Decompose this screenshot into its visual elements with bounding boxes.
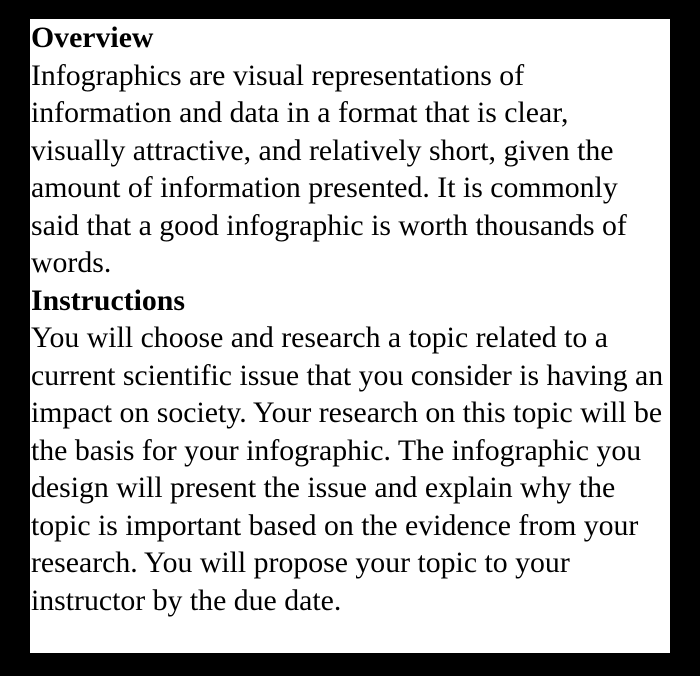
text: overview body: words. — [31, 246, 111, 279]
text: instructions body: current scientific issue that you consider is having an — [31, 358, 663, 392]
text: instructions body: research. You will propose your topic to your — [31, 546, 570, 579]
text: instructions body: topic is important based on the evidence from your — [31, 508, 638, 542]
heading: overview: Overview — [31, 21, 153, 54]
text: instructions body: instructor by the due date. — [31, 584, 341, 616]
text: overview body: information and data in a format that is clear, — [31, 96, 568, 129]
text: instructions body — [31, 321, 663, 616]
heading: instructions: Instructions — [31, 284, 185, 316]
text: overview body: Infographics are visual representations of — [31, 58, 524, 92]
text: overview body: said that a good infographic is worth thousands of — [31, 208, 627, 242]
text: instructions body: You will choose and research a topic related to a — [31, 321, 608, 354]
text: overview body — [31, 58, 627, 279]
text: overview body: amount of information presented. It is commonly — [31, 171, 618, 204]
text: instructions body: the basis for your infographic. The infographic you — [31, 434, 641, 466]
text: instructions body: design will present the issue and explain why the — [31, 471, 615, 504]
text: instructions body: impact on society. Your research on this topic will be — [31, 396, 662, 429]
text: overview body: visually attractive, and relatively short, given the — [31, 134, 614, 166]
